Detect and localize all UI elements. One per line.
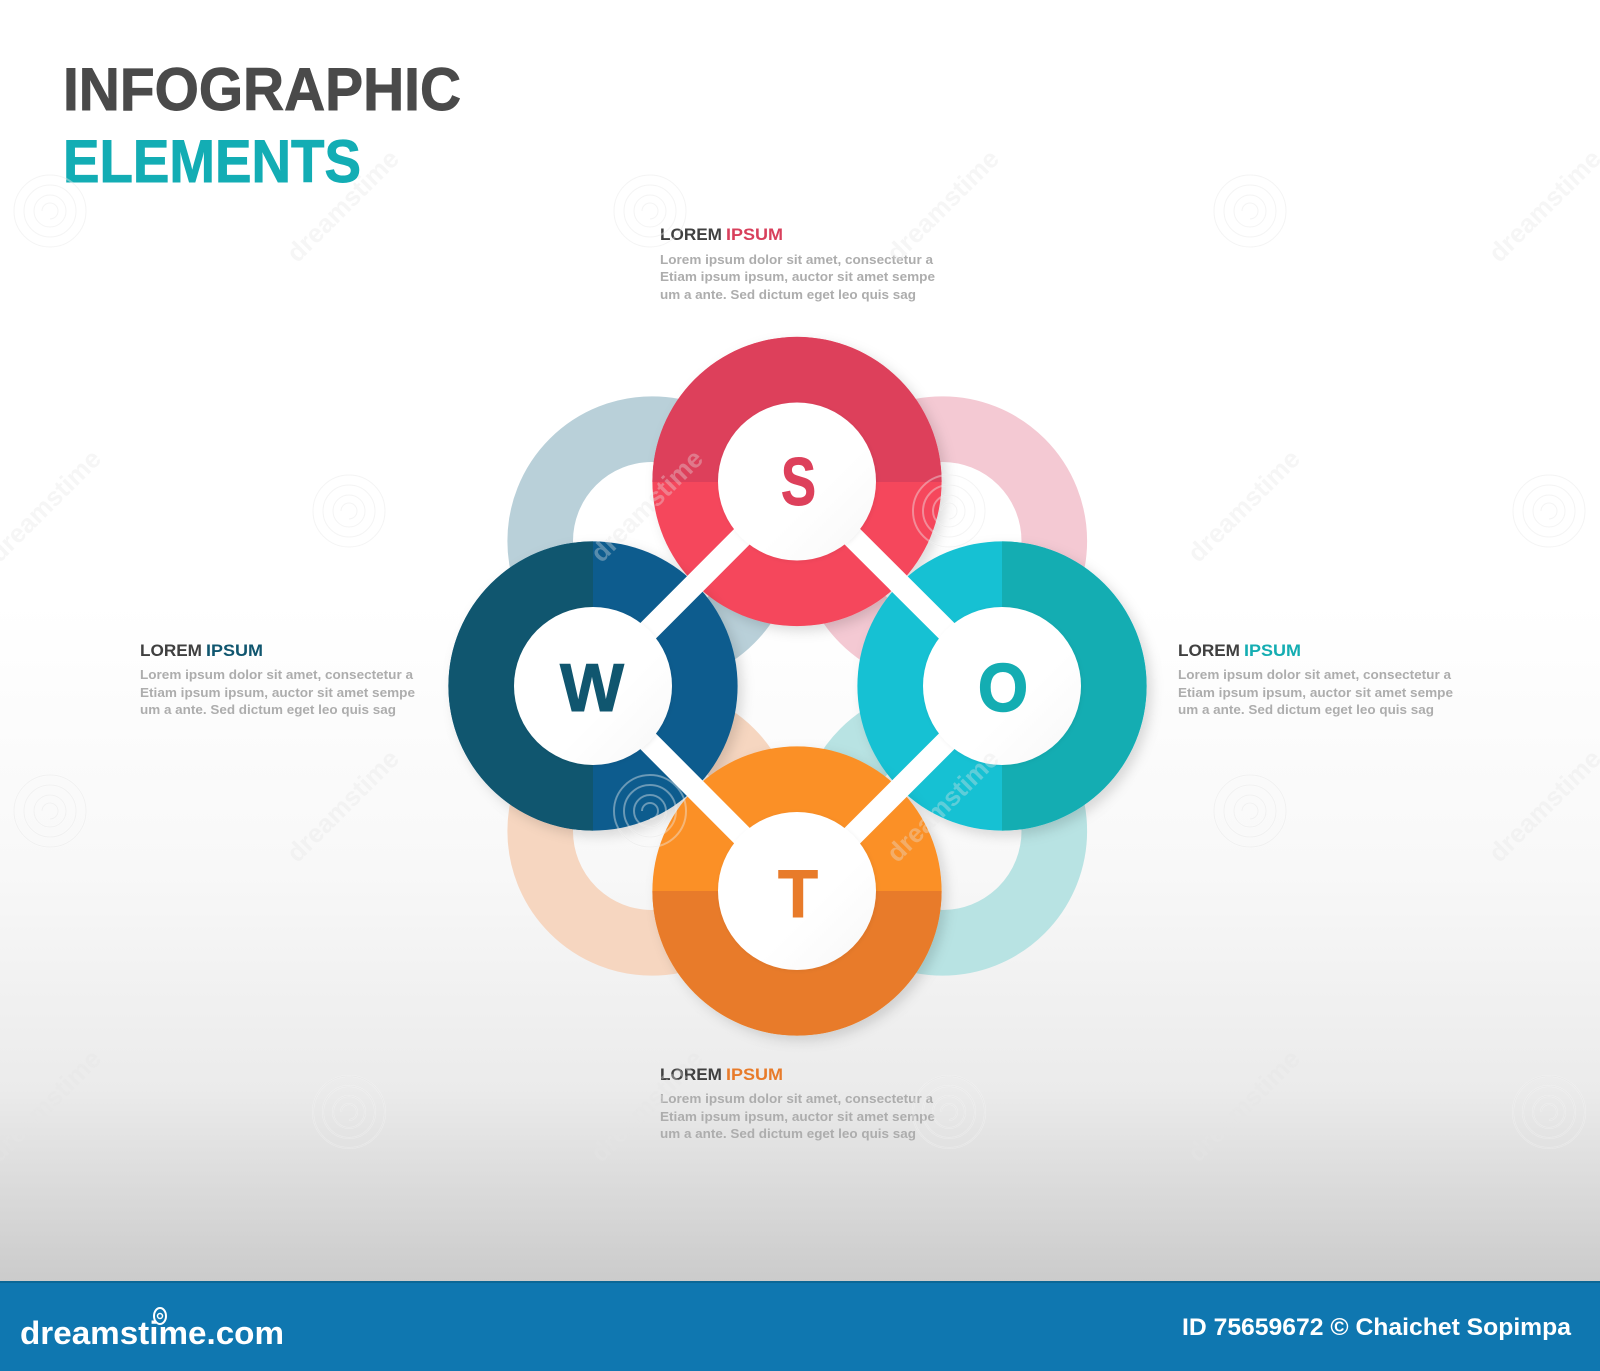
text block: left: Lorem ipsum dolor sit amet, consectetur a [140, 667, 414, 682]
text block: right [1178, 642, 1453, 717]
watermark text [0, 143, 1600, 1168]
white diamond connector [593, 482, 1002, 891]
letter W: W [560, 650, 625, 726]
text block: bottom: IPSUM [726, 1066, 783, 1084]
title [63, 56, 461, 195]
text block: left: um a ante. Sed dictum eget leo quis sag [140, 702, 396, 717]
SWOT ring S [652, 337, 942, 626]
SWOT ring O [857, 541, 1147, 831]
text block: top: Lorem ipsum dolor sit amet, consectetur a [660, 252, 934, 267]
text block: bottom: um a ante. Sed dictum eget leo quis sag [660, 1126, 916, 1141]
watermark text: dreamstime [584, 443, 709, 568]
title: ELEMENTS [63, 128, 361, 195]
text block: left [140, 642, 415, 717]
text block: right: Lorem ipsum dolor sit amet, consectetur a [1178, 667, 1452, 682]
text block: bottom: LOREM [660, 1066, 722, 1084]
text block: top: Etiam ipsum ipsum, auctor sit amet sempe [660, 269, 935, 284]
text block: bottom: Lorem ipsum dolor sit amet, consectetur a [660, 1091, 934, 1106]
text block: right: IPSUM [1244, 642, 1301, 660]
text block: bottom: Etiam ipsum ipsum, auctor sit amet sempe [660, 1109, 935, 1124]
text block: left: Etiam ipsum ipsum, auctor sit amet sempe [140, 685, 415, 700]
text block: left: IPSUM [206, 642, 263, 660]
title: INFOGRAPHIC [63, 56, 461, 123]
watermark text: dreamstime [1181, 443, 1306, 568]
SWOT ring W [448, 541, 738, 831]
faded background rings [540, 429, 1054, 943]
text block: right: LOREM [1178, 642, 1240, 660]
text block: right: Etiam ipsum ipsum, auctor sit amet sempe [1178, 685, 1453, 700]
letter S: S [781, 444, 816, 520]
watermark text: dreamstime [880, 143, 1005, 268]
watermark text: dreamstime [280, 743, 405, 868]
text block: left: LOREM [140, 642, 202, 660]
letter T: T [778, 856, 818, 932]
text block: top: um a ante. Sed dictum eget leo quis sag [660, 287, 916, 302]
text block: top [660, 226, 935, 302]
inner white discs [514, 402, 1081, 970]
letter O: O [978, 650, 1028, 726]
footer credit: ID 75659672 © Chaichet Sopimpa [1182, 1314, 1572, 1341]
text block: right: um a ante. Sed dictum eget leo quis sag [1178, 702, 1434, 717]
text block: bottom [660, 1066, 935, 1141]
watermark text: dreamstime [1181, 1043, 1306, 1168]
text block: top: LOREM [660, 226, 722, 244]
watermark text: dreamstime [280, 143, 405, 268]
watermark text: dreamstime [584, 1043, 709, 1168]
text block: top: IPSUM [726, 226, 783, 244]
watermark text: dreamstime [880, 743, 1005, 868]
SWOT ring T [652, 746, 942, 1036]
footer logo: dreamstime.com [20, 1315, 284, 1351]
watermark spirals [14, 175, 1585, 1148]
footer bar [0, 1281, 1600, 1371]
